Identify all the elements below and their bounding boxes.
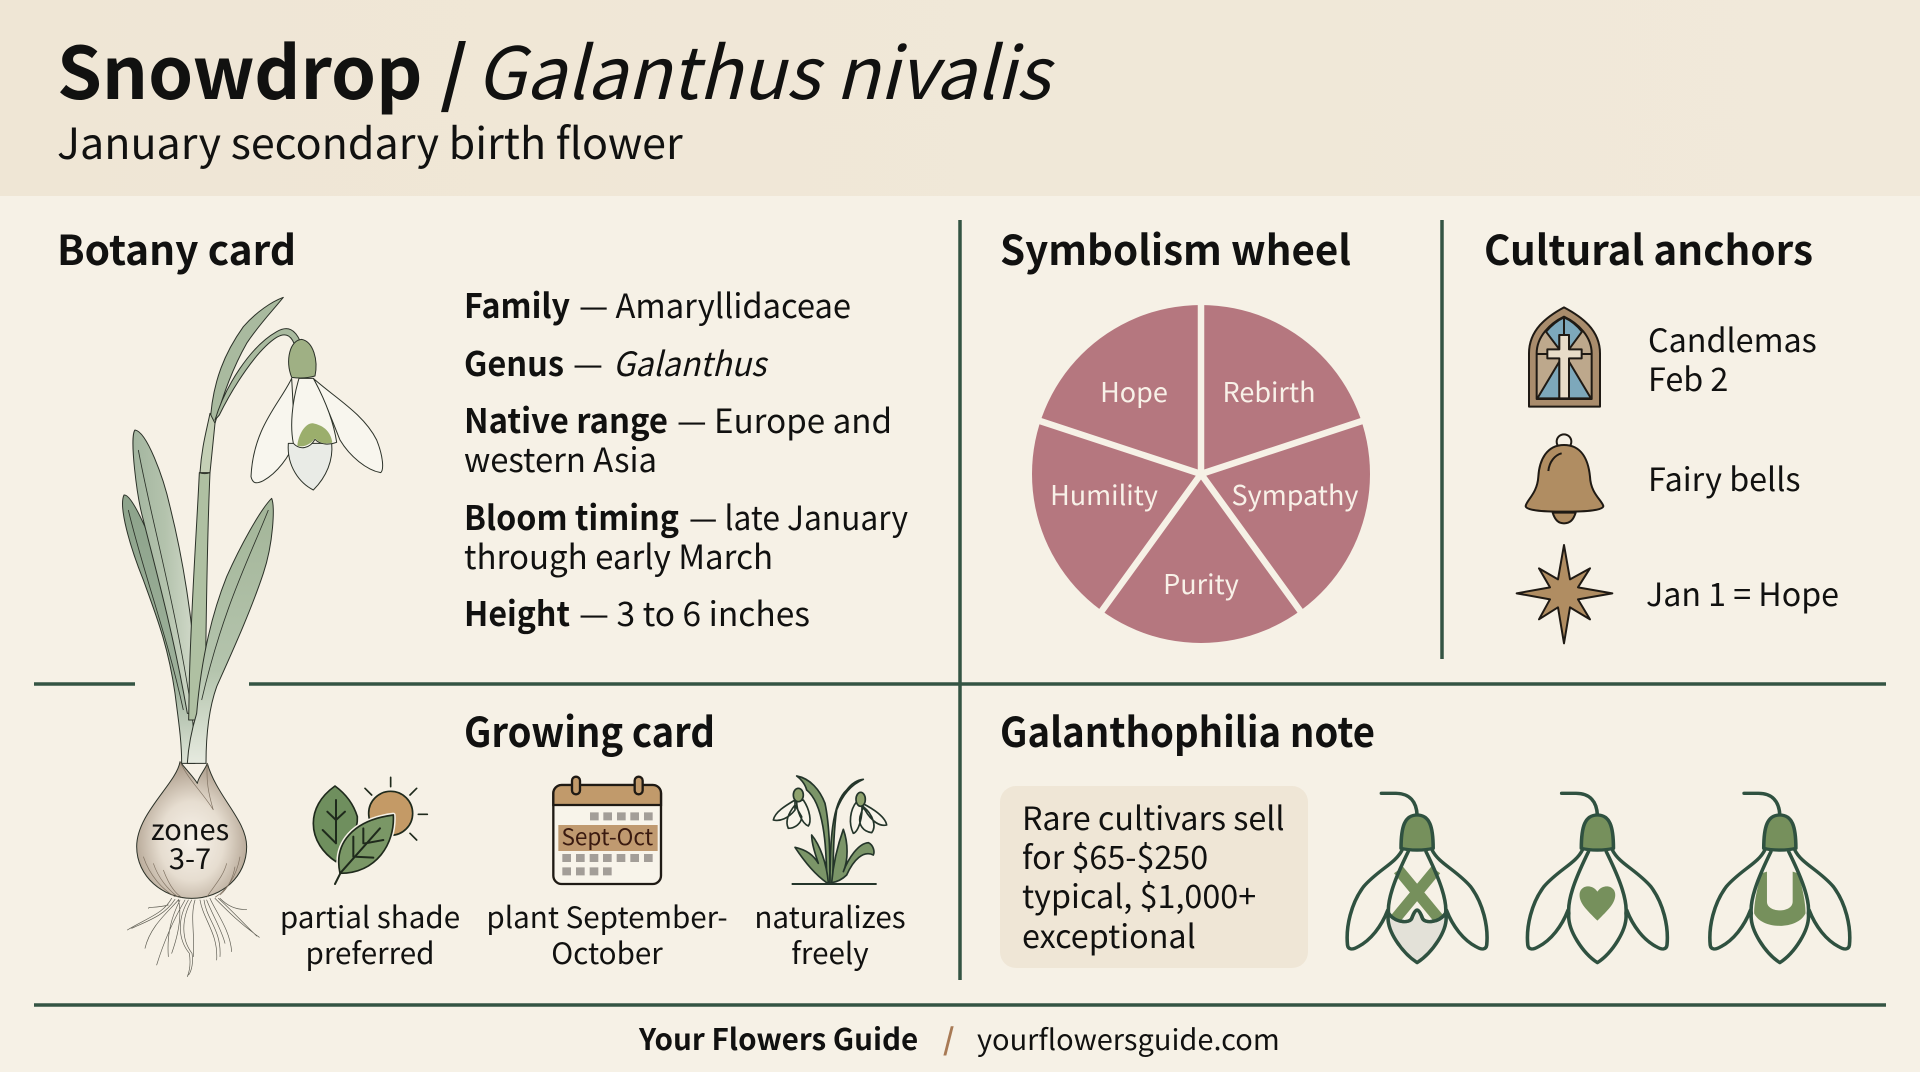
- label: candlemas: Candlemas: [1648, 316, 1817, 362]
- leaf: spathe: [210, 297, 283, 427]
- zones label: 3-7: [169, 836, 211, 878]
- label: candlemas: Feb 2: [1648, 355, 1728, 401]
- facts list: Native range: [464, 394, 668, 443]
- callout: for $65-$250: [1022, 833, 1208, 879]
- icon: snowdrop cluster: [773, 776, 887, 884]
- icon: calendar: [553, 777, 661, 884]
- stem: [189, 473, 210, 720]
- panel: growing card: [280, 699, 906, 973]
- icon: bell: [1526, 434, 1603, 523]
- icon: flower with U mark: [1710, 793, 1850, 963]
- pie chart: Purity: [1163, 563, 1239, 602]
- footer: Your Flowers Guide: [638, 1016, 918, 1059]
- back left leaf: [123, 495, 195, 763]
- label: naturalizes freely: freely: [791, 930, 869, 973]
- facts list: — late January: [689, 491, 908, 540]
- label: partial shade: preferred: [306, 930, 434, 973]
- pedicel: [215, 329, 300, 420]
- facts list: — Amaryllidaceae: [579, 279, 851, 328]
- label: fairy bells: Fairy bells: [1648, 455, 1801, 501]
- icon: flower with heart mark: [1527, 793, 1667, 963]
- heading: symbolism wheel: Symbolism wheel: [1000, 217, 1351, 277]
- footer: /: [943, 1016, 954, 1059]
- facts list: Bloom timing: [464, 491, 679, 540]
- callout: Rare cultivars sell: [1022, 794, 1285, 840]
- heading: galanthophilia note: Galanthophilia note: [1000, 699, 1375, 759]
- subtitle: January secondary birth flower: [57, 110, 683, 172]
- label: plant september-october: [486, 894, 728, 973]
- label: naturalizes freely: naturalizes: [754, 894, 906, 937]
- zones label: [151, 807, 229, 878]
- pie chart: Hope: [1100, 371, 1168, 410]
- label: candlemas: [1648, 316, 1817, 401]
- facts list: Galanthus: [613, 337, 769, 386]
- facts list: —: [573, 337, 603, 386]
- facts list: — Europe and: [677, 394, 892, 443]
- zones label: zones: [151, 807, 229, 849]
- label: plant september-october: October: [551, 930, 663, 973]
- ovary: [289, 339, 316, 378]
- icon: calendar: Sept-Oct: [561, 819, 654, 852]
- heading: cultural anchors: Cultural anchors: [1484, 217, 1813, 277]
- facts list: through early March: [464, 530, 773, 579]
- illustration: snowdrop plant with bulb: [123, 297, 383, 977]
- heading: botany card: Botany card: [57, 217, 296, 277]
- pie chart: Humility: [1050, 474, 1158, 513]
- pie chart: Sympathy: [1232, 474, 1358, 513]
- panel: cultural anchors: [1484, 217, 1839, 643]
- green mark: [297, 423, 332, 446]
- panel: galanthophilia note: [1000, 699, 1850, 968]
- facts list: Height: [464, 587, 570, 636]
- bulb: [137, 762, 247, 898]
- heading: growing card: Growing card: [464, 699, 715, 759]
- label: partial shade: partial shade: [280, 894, 460, 937]
- icon: flower with X mark: [1347, 793, 1487, 963]
- label: plant september-october: plant September-: [486, 894, 728, 937]
- header band: [0, 0, 1920, 196]
- pie chart: [1032, 300, 1370, 643]
- callout: [1000, 786, 1308, 968]
- icon: stained glass window: [1529, 307, 1600, 407]
- panel: symbolism wheel: [1000, 217, 1370, 643]
- facts list: western Asia: [464, 433, 657, 482]
- facts list: [464, 279, 908, 636]
- facts list: — 3 to 6 inches: [579, 587, 810, 636]
- big left leaf: [133, 430, 198, 713]
- title: /: [440, 15, 468, 120]
- footer: yourflowersguide.com: [977, 1017, 1280, 1059]
- facts list: Genus: [464, 337, 564, 386]
- facts list: Family: [464, 279, 570, 328]
- pie chart: Rebirth: [1223, 371, 1315, 410]
- callout: exceptional: [1022, 912, 1196, 958]
- callout: typical, $1,000+: [1022, 872, 1256, 918]
- right leaf: [187, 498, 273, 763]
- roots: [127, 898, 259, 977]
- footer: [638, 1016, 1280, 1059]
- label: jan 1 hope: Jan 1 = Hope: [1646, 570, 1839, 616]
- panel: botany card: [57, 217, 908, 636]
- flower petals: [251, 378, 295, 483]
- icon: star: [1517, 545, 1612, 643]
- label: naturalizes freely: [754, 894, 906, 973]
- label: partial shade: [280, 894, 460, 973]
- title: Snowdrop: [57, 15, 422, 120]
- title: Galanthus nivalis: [476, 15, 1055, 120]
- icon: leaves and sun: [313, 777, 427, 884]
